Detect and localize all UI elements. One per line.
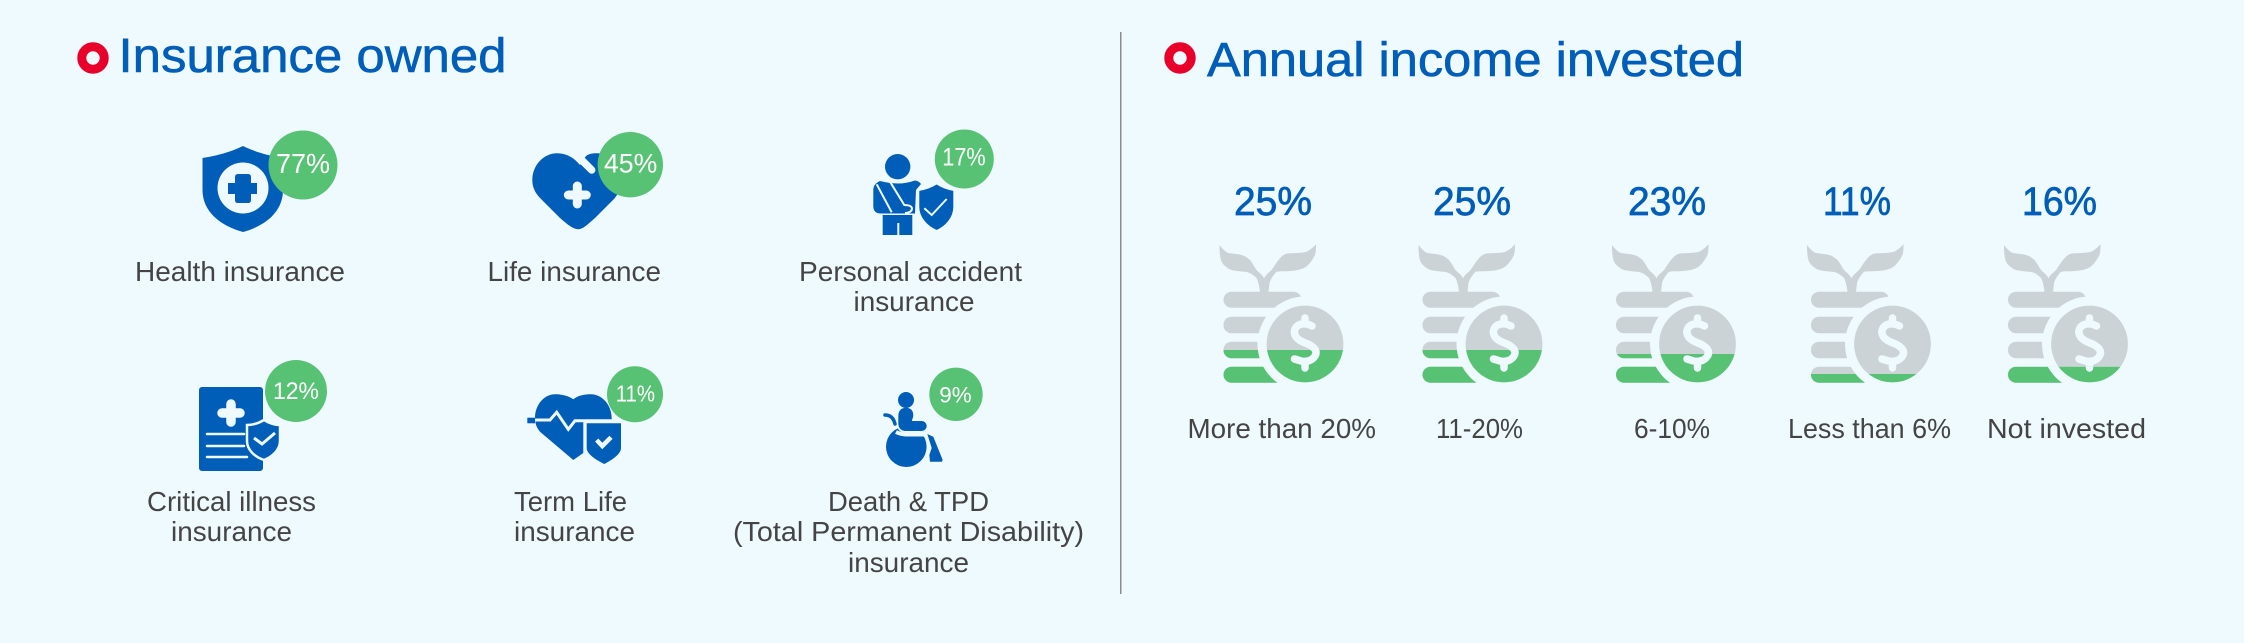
badge: 77%: 77%: [276, 148, 330, 179]
icon: medical document with shield: [199, 387, 280, 471]
label: health insurance: Health insurance: [135, 256, 345, 287]
badge: 17%: 17%: [942, 144, 986, 172]
value: 25%: 25%: [1433, 180, 1511, 224]
badge: 9%: 9%: [939, 382, 972, 407]
label: personal accident insurance: [799, 256, 1022, 317]
icon: heart with cross: [532, 153, 622, 229]
item: death and TPD insurance: [733, 368, 1084, 578]
badge: 12%: [265, 360, 327, 422]
icon: wheelchair user: [885, 392, 943, 467]
icon: shield with cross: [202, 146, 283, 232]
label: death and TPD insurance: insurance: [848, 547, 969, 578]
label: critical illness insurance: Critical illness: [147, 486, 316, 517]
label: term life insurance: Term Life: [514, 486, 627, 517]
value: 16%: 16%: [2022, 180, 2097, 224]
badge: 45%: 45%: [604, 149, 657, 179]
panel: insurance owned: [82, 30, 1084, 578]
icon: coins and plant, 25% filled: [1220, 244, 1344, 383]
panel: annual income invested: [1169, 34, 2146, 444]
badge: 12%: 12%: [273, 378, 319, 405]
value: 11%: 11%: [1823, 180, 1891, 224]
icon: coins and plant, 16% filled: [2004, 244, 2128, 383]
label: personal accident insurance: insurance: [854, 286, 974, 317]
label: more than 20%: More than 20%: [1188, 413, 1376, 444]
heading: annual income invested: Annual income invested: [1207, 34, 1744, 87]
column: less than 6%: [1788, 180, 1951, 444]
column: 11-20%: [1418, 186, 1542, 438]
item: personal accident insurance: [799, 130, 1022, 317]
label: critical illness insurance: [147, 486, 316, 547]
item: health insurance: [135, 130, 345, 287]
label: critical illness insurance: insurance: [171, 516, 292, 547]
badge: 45%: [598, 132, 663, 197]
item: term life insurance: [514, 366, 663, 547]
badge: 17%: [935, 130, 994, 188]
heading: insurance owned: Insurance owned: [118, 30, 507, 83]
label: less than 6%: Less than 6%: [1788, 413, 1951, 444]
label: death and TPD insurance: [733, 486, 1084, 578]
badge: 9%: [929, 368, 983, 421]
icon: coins and plant, 23% filled: [1612, 244, 1736, 383]
label: term life insurance: insurance: [514, 516, 635, 547]
icon: injured person with shield: [873, 154, 954, 235]
value: 25%: 25%: [1234, 180, 1312, 224]
value: 23%: 23%: [1628, 180, 1706, 224]
label: 6-10%: 6-10%: [1634, 413, 1710, 444]
icon: coins and plant, 25% filled: [1418, 244, 1542, 383]
badge: 11%: [607, 366, 663, 422]
column: 6-10%: [1612, 186, 1736, 438]
label: death and TPD insurance: Death & TPD: [828, 486, 989, 517]
badge: 11%: 11%: [616, 381, 655, 407]
column: more than 20%: [1188, 180, 1376, 444]
label: personal accident insurance: Personal accident: [799, 256, 1022, 287]
label: life insurance: Life insurance: [488, 256, 661, 287]
label: 11-20%: 11-20%: [1436, 413, 1523, 444]
label: death and TPD insurance: (Total Permanent Disability): [733, 516, 1084, 547]
badge: 77%: [268, 130, 338, 200]
icon: coins and plant, 11% filled: [1807, 244, 1931, 383]
item: life insurance: [488, 132, 663, 287]
label: term life insurance: [514, 486, 635, 547]
icon: heart with pulse and shield: [527, 394, 621, 464]
column: not invested: [1987, 180, 2146, 444]
item: critical illness insurance: [147, 360, 327, 547]
label: not invested: Not invested: [1987, 413, 2146, 444]
